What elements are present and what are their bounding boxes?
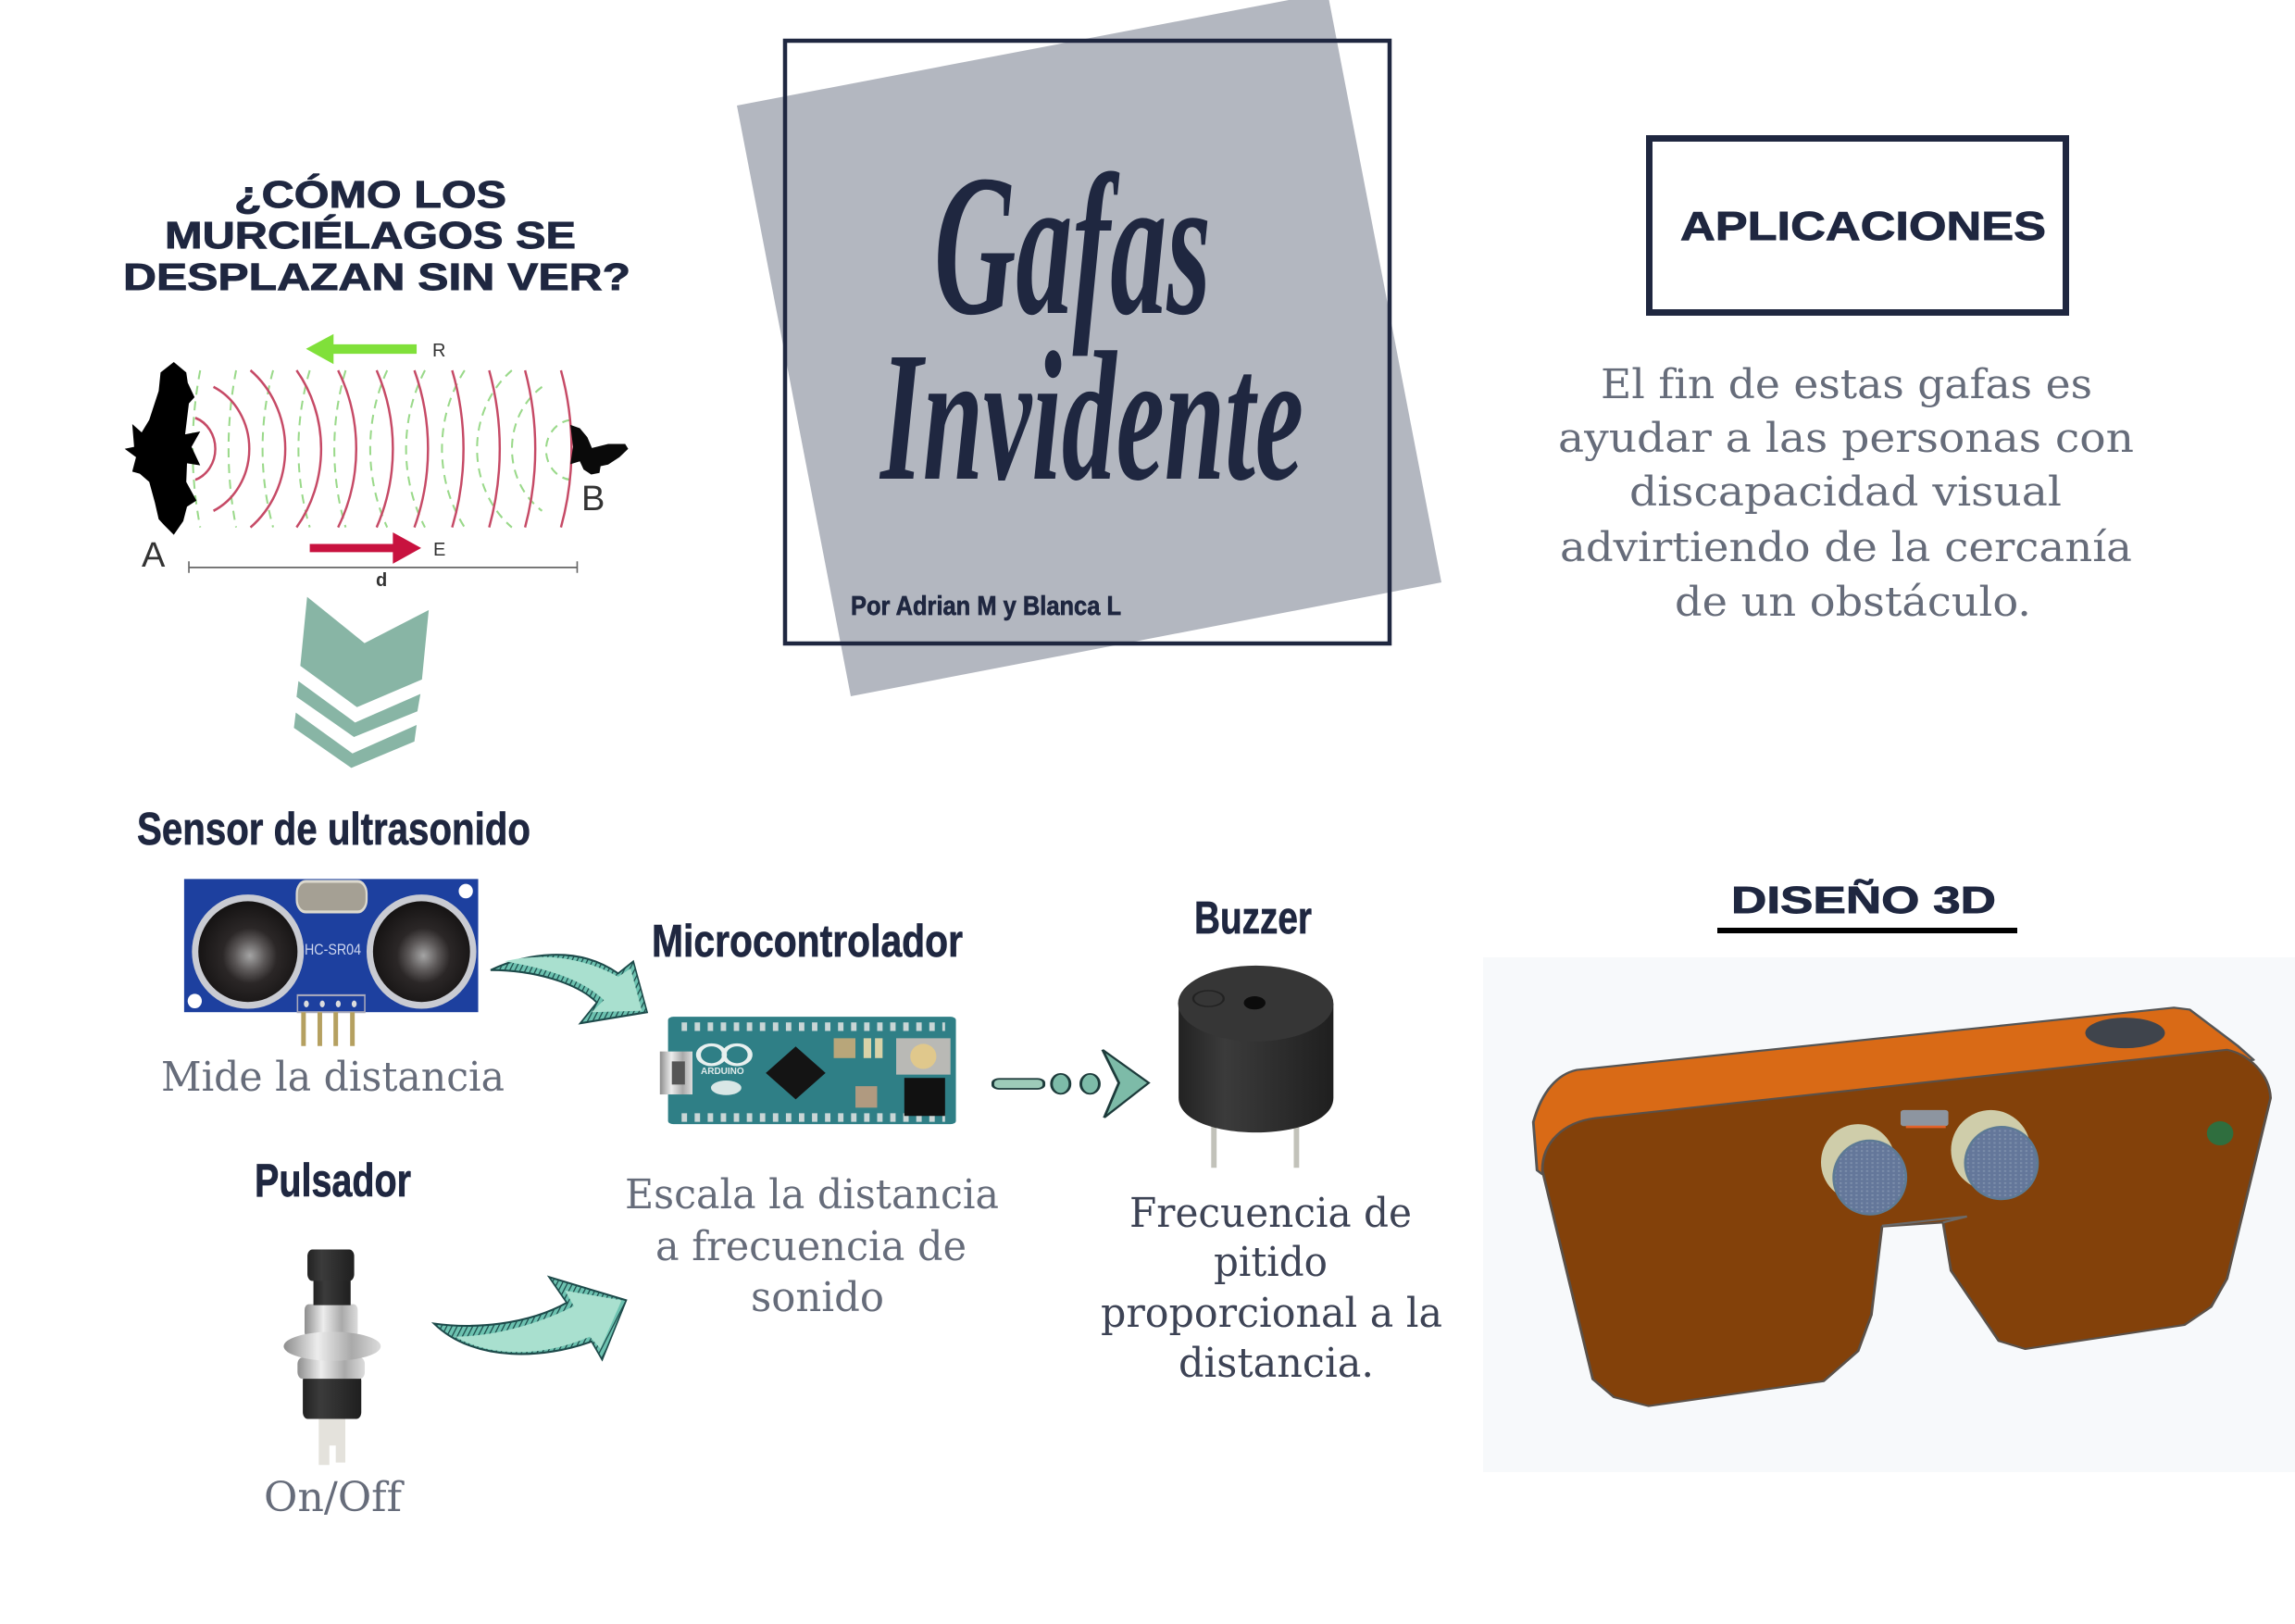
heading: sensor: Sensor de ultrasonido [137, 805, 530, 855]
arrow: sensor to microcontroller [491, 955, 647, 1023]
bridge underside [1882, 1217, 1967, 1226]
caption: buzzer [1101, 1190, 1442, 1387]
caption: microcontroller: a frecuencia de [655, 1223, 967, 1270]
applications heading: APLICACIONES [1680, 204, 2046, 249]
applications frame [1650, 139, 2066, 313]
red emitted waves [195, 370, 571, 528]
heading: 3D design: DISEÑO 3D [1731, 879, 1996, 921]
wave arcs and silhouettes [125, 334, 629, 573]
image: 3D glasses model [1533, 1007, 2271, 1406]
caption: buzzer: pitido [1214, 1239, 1328, 1286]
applications text: advirtiendo de la cercanía [1560, 524, 2132, 571]
heading: bats: MURCIÉLAGOS SE [165, 214, 576, 256]
heading: bats [123, 173, 630, 298]
heading: buzzer: Buzzer [1194, 893, 1312, 943]
applications text: discapacidad visual [1629, 468, 2062, 516]
authors: Por Adrian M y Blanca L [851, 592, 1121, 621]
label E: E [433, 540, 445, 560]
slot [1901, 1110, 1949, 1126]
diagram: bat echolocation [125, 334, 629, 591]
label B: B [581, 480, 605, 518]
applications text: ayudar a las personas con [1558, 415, 2134, 462]
applications text: de un obstáculo. [1675, 579, 2031, 626]
arrow: emitted signal [310, 532, 421, 564]
top face [1533, 1007, 2253, 1174]
left ultrasonic capsule [1821, 1124, 1895, 1200]
icon: down chevrons [293, 597, 429, 768]
sensor model label: HC-SR04 [305, 941, 361, 958]
image: arduino micro [660, 1017, 956, 1124]
title line 2: Invidente [879, 315, 1303, 519]
caption: microcontroller [625, 1171, 999, 1321]
heading: microcontroller: Microcontrolador [652, 917, 963, 967]
label R: R [432, 341, 445, 361]
panel: 3D viewport background [1483, 957, 2295, 1472]
icon: bat silhouette [125, 362, 200, 535]
applications text [1558, 361, 2134, 626]
board label: ARDUINO [701, 1067, 744, 1077]
green returning waves [193, 370, 570, 528]
image: buzzer [1179, 966, 1333, 1168]
label A: A [142, 536, 166, 575]
arrow: microcontroller to buzzer [992, 1050, 1149, 1118]
title frame [785, 41, 1390, 643]
caption: buzzer: proporcional a la [1101, 1290, 1442, 1337]
icon: butterfly silhouette [570, 425, 629, 474]
arrow: return signal [306, 334, 417, 364]
label d: d [376, 570, 387, 591]
caption: buzzer: distancia. [1179, 1340, 1374, 1387]
image: ultrasonic sensor [184, 879, 479, 1046]
caption: microcontroller: sonido [751, 1274, 884, 1321]
panel: title card [737, 0, 1441, 696]
caption: buzzer: Frecuencia de [1129, 1190, 1412, 1237]
image: push button [283, 1249, 380, 1465]
heading: bats: ¿CÓMO LOS [234, 173, 506, 216]
panel: applications [1558, 139, 2134, 626]
heading: 3D design [1717, 879, 2017, 933]
front face [1542, 1050, 2271, 1406]
caption: microcontroller: Escala la distancia [625, 1171, 999, 1218]
distance line [189, 561, 577, 573]
caption: on/off: On/Off [264, 1474, 405, 1521]
title line 1: Gafas [934, 134, 1211, 357]
grey rotated square [737, 0, 1441, 696]
applications text: El fin de estas gafas es [1601, 361, 2092, 408]
heading: bats: DESPLAZAN SIN VER? [123, 256, 630, 298]
arrow: button to microcontroller [434, 1277, 626, 1360]
right ultrasonic capsule [1951, 1110, 2030, 1191]
power button [2085, 1018, 2164, 1048]
LED [2207, 1121, 2233, 1145]
caption: measures distance: Mide la distancia [161, 1054, 505, 1101]
heading: button: Pulsador [255, 1155, 411, 1206]
